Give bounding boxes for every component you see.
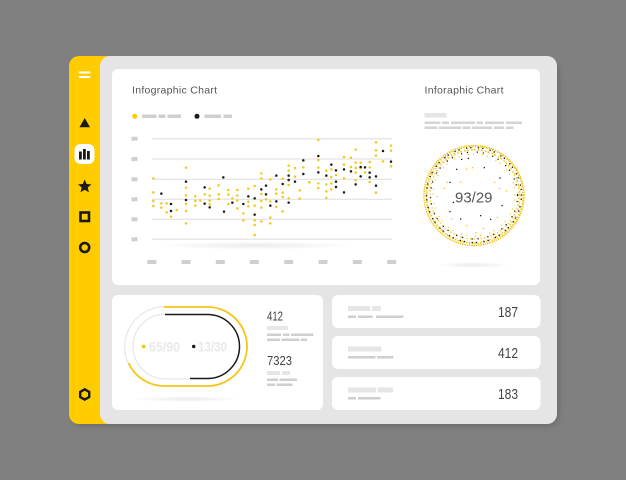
stadium value black: 13/30 <box>198 340 227 354</box>
icon: menu <box>78 72 90 78</box>
stadium value yellow: 65/90 <box>149 340 180 354</box>
stat: 412: 412 <box>267 308 283 324</box>
sidebar <box>69 56 129 424</box>
ring chart <box>424 146 524 268</box>
row: 412 <box>332 336 540 369</box>
heading: scatter chart: Infographic Chart <box>132 84 217 96</box>
row: 183 <box>332 377 540 410</box>
heading: ring chart: Inforaphic Chart <box>424 84 504 96</box>
panel: stadium chart <box>112 295 323 410</box>
icon: star <box>78 180 91 192</box>
stadium tracks <box>125 306 247 386</box>
main panel <box>100 56 557 424</box>
icon: hexagon <box>80 389 89 400</box>
row: 183: 183 <box>498 386 518 403</box>
row: 412: 412 <box>498 345 518 362</box>
ring description <box>424 113 522 129</box>
panel: top charts <box>112 69 540 285</box>
scatter chart <box>132 137 396 264</box>
stat: 7323 <box>267 353 297 386</box>
legend <box>132 114 232 119</box>
icon: circle <box>80 243 89 252</box>
stat: 412 <box>267 308 314 341</box>
icon: square <box>80 212 89 221</box>
ring value: 93/29 <box>455 190 492 206</box>
icon: triangle <box>80 118 90 127</box>
icon: active bar chart <box>74 144 94 164</box>
row: 187: 187 <box>498 304 518 321</box>
row: 187 <box>332 295 540 328</box>
stat: 7323: 7323 <box>267 353 292 368</box>
